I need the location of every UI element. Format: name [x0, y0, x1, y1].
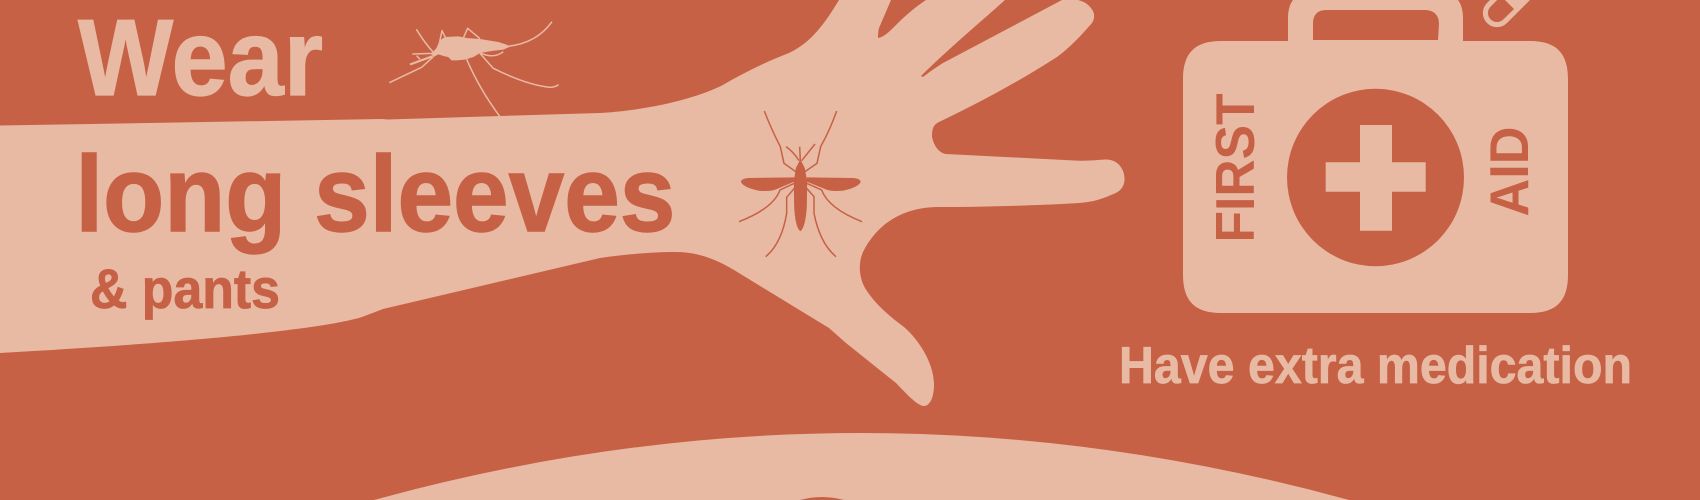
kit label: AID: AID: [1478, 126, 1540, 216]
icon: capsule: [1483, 0, 1530, 27]
caption: Have extra medication: Have extra medication: [1119, 337, 1632, 395]
kit cross: [1326, 125, 1426, 231]
subheading: & pants: & pants: [90, 257, 280, 320]
heading: long sleeves: long sleeves: [75, 133, 675, 254]
icon: side-view mosquito: [389, 22, 559, 117]
illustration: arm and hand: [0, 0, 1124, 406]
icon: first aid kit: [1183, 0, 1568, 313]
heading: Wear: Wear: [78, 0, 323, 119]
icon: top-view mosquito: [739, 111, 862, 257]
capsule hollow half: [1488, 0, 1514, 22]
illustration: bottom dome: [374, 433, 1349, 500]
bottom dome dark tip: [800, 497, 844, 500]
kit label: FIRST: FIRST: [1204, 94, 1266, 242]
kit circle: [1287, 89, 1464, 266]
